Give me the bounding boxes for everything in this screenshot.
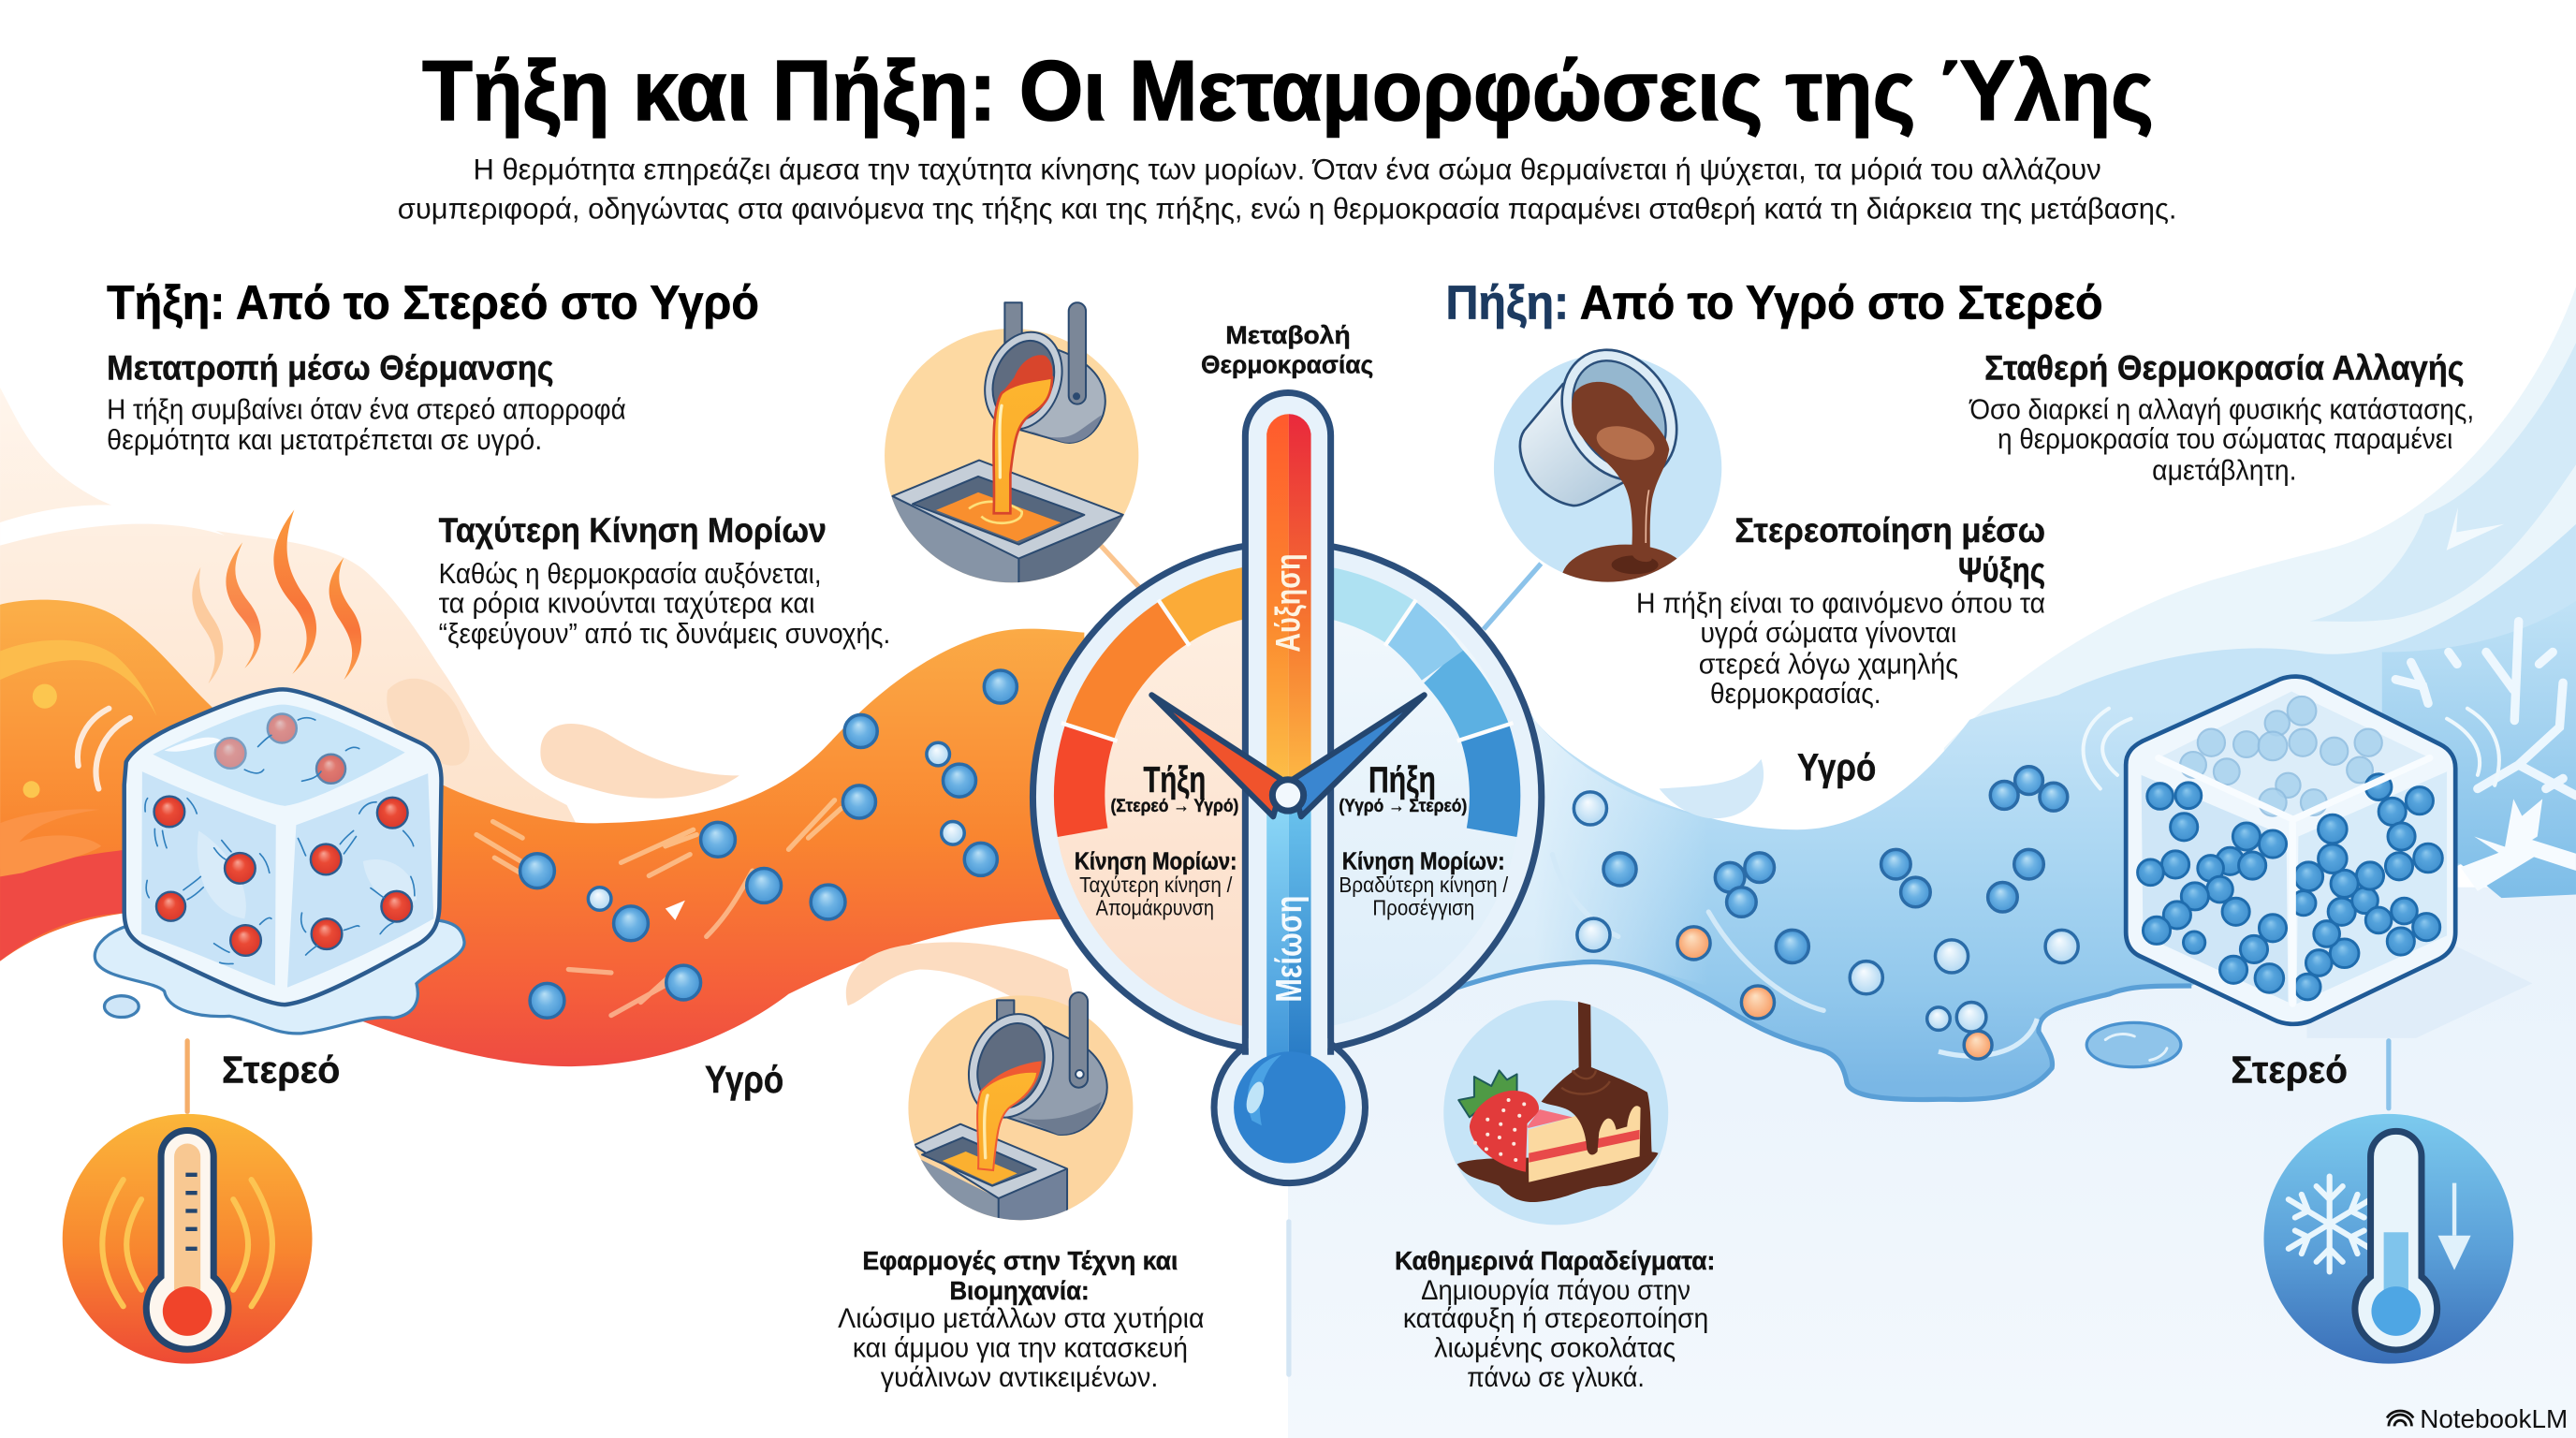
cube body: [124, 689, 441, 1005]
text block: everyday examples: Δημιουργία πάγου στην: [1421, 1275, 1690, 1306]
white swoosh in swirl: [0, 505, 225, 546]
text block: applications: και άμμου για την κατασκευή: [853, 1333, 1188, 1364]
top face: [2159, 691, 2430, 817]
peach blob lower: [846, 942, 1084, 1051]
gauge left half: [1054, 620, 1242, 1026]
orange link: [184, 1038, 190, 1114]
heading: melting: Τήξη: Από το Στερεό στο Υγρό: [107, 275, 759, 329]
yellow crescent: [0, 640, 156, 716]
intro text: Η θερμότητα επηρεάζει άμεσα την ταχύτητα κίνησης των μορίων. Όταν ένα σώμα θερμαίνεται ή ψύχεται, τα μόριά του αλλάζουν: [474, 152, 2101, 185]
face shading: [198, 830, 417, 918]
text block: solidifying by cooling: θερμοκρασίας.: [1710, 677, 1881, 710]
text block: applications: Εφαρμογές στην Τέχνη και: [862, 1246, 1178, 1275]
text block: constant temperature: [1969, 348, 2474, 486]
hanger right: [1069, 302, 1086, 404]
moving molecules: [520, 670, 1017, 1018]
text block: applications: Βιομηχανία:: [949, 1276, 1090, 1305]
text block: constant temperature: η θερμοκρασία του σώματας παραμένει: [1998, 422, 2452, 455]
text block: constant temperature: Όσο διαρκεί η αλλαγή φυσικής κατάστασης,: [1969, 393, 2474, 426]
ice shard: [2461, 799, 2576, 891]
thermometer fill: [2384, 1232, 2408, 1290]
chocolate stream: [1572, 382, 1669, 562]
background: cool lower right: [1288, 888, 2576, 1438]
left face: [2142, 775, 2288, 1002]
molten stream: [993, 377, 1052, 513]
mould top: [914, 1124, 1067, 1198]
liquid molecules: [1573, 767, 2078, 1059]
mould sides: [921, 1159, 998, 1218]
bulb: [1214, 1032, 1365, 1183]
cube edge highlights: [2159, 758, 2430, 1004]
pale peach swirl: [0, 388, 592, 855]
text block: applications: γυάλινων αντικειμένων.: [881, 1362, 1158, 1393]
ice crystals: [2395, 622, 2576, 796]
text block: faster motion: Ταχύτερη Κίνηση Μορίων: [439, 511, 827, 550]
icon: chocolate pouring: [1494, 348, 1722, 582]
gauge text: melting: Κίνηση Μορίων:: [1075, 848, 1237, 874]
ice cube: solid melting: [95, 689, 464, 1034]
cube shadow: [2307, 946, 2532, 1038]
sparks: [33, 684, 57, 709]
red needle: [1151, 695, 1283, 816]
gauge text: freezing: [1339, 760, 1509, 920]
small motion arrow: [666, 901, 685, 920]
water drop: [2086, 1022, 2181, 1067]
text block: constant temperature: αμετάβλητη.: [2152, 453, 2297, 486]
label: solid right: Στερεό: [2231, 1049, 2348, 1092]
chocolate topping: [1542, 1002, 1652, 1158]
gauge text: freezing: (Υγρό → Στερεό): [1339, 797, 1467, 816]
white swoosh in bowl: [1660, 759, 1764, 818]
crystal area: [2086, 601, 2576, 1067]
text block: solidifying by cooling: [1636, 511, 2045, 710]
label: temperature change: [1201, 320, 1373, 378]
text block: everyday examples: Καθημερινά Παραδείγματα:: [1395, 1246, 1715, 1275]
label: solid left: Στερεό: [222, 1049, 340, 1092]
text block: solidifying by cooling: Ψύξης: [1958, 550, 2045, 589]
text block: solidifying by cooling: Στερεοποίηση μέσω: [1734, 511, 2045, 550]
hanger left: [1004, 302, 1022, 344]
panel: freezing wave: [1288, 286, 2576, 1100]
trapped particles: [268, 713, 297, 742]
label: temperature change: Θερμοκρασίας: [1201, 349, 1373, 378]
chocolate puddle: [1563, 545, 1677, 582]
right face: [2297, 771, 2447, 1004]
icon: cooling thermometer: [2263, 1038, 2513, 1364]
gauge text: melting: [1075, 760, 1238, 920]
gauge text: melting: Τήξη: [1144, 760, 1206, 800]
upper right pale wash: [1944, 286, 2576, 751]
notebooklm mark: NotebookLM: [2420, 1404, 2568, 1433]
ladle rim: [972, 321, 1076, 440]
icon: heating thermometer: [63, 1038, 313, 1364]
connector line: ladle to gauge: [1101, 546, 1140, 588]
text block: everyday examples: πάνω σε γλυκά.: [1467, 1362, 1645, 1393]
text block: conversion by heating: θερμότητα και μετατρέπεται σε υγρό.: [107, 423, 542, 456]
hot column: [1266, 414, 1289, 795]
strawberry: [1470, 1091, 1539, 1172]
gauge right half: [1335, 609, 1462, 1025]
text block: constant temperature: Σταθερή Θερμοκρασία Αλλαγής: [1984, 348, 2465, 387]
intro text: [398, 152, 2176, 225]
melt puddle: [95, 920, 464, 1034]
vibration ticks: [145, 718, 415, 964]
cup rim: [1539, 329, 1700, 501]
blue needle: [1292, 695, 1425, 816]
down arrow: [2453, 1183, 2455, 1236]
label: decrease: Μείωση: [1269, 895, 1310, 1003]
gauge text: melting: (Στερεό → Υγρό): [1110, 797, 1238, 816]
gauge text: freezing: Προσέγγιση: [1372, 896, 1474, 920]
text block: conversion by heating: Η τήξη συμβαίνει όταν ένα στερεό απορροφά: [107, 393, 626, 426]
cup body: [1520, 384, 1673, 506]
cold scale segments: [1324, 592, 1495, 832]
tube: [1245, 392, 1331, 1051]
lower molecules: [2138, 774, 2442, 1000]
icon: ladle pouring into mould (bottom): [908, 992, 1133, 1233]
gauge text: melting: Ταχύτερη κίνηση /: [1079, 873, 1233, 897]
cube body: [2126, 677, 2455, 1024]
label: temperature change: Μεταβολή: [1225, 320, 1351, 349]
divider line: [1286, 1219, 1292, 1377]
heading: freezing: Πήξη: Από το Υγρό στο Στερεό: [1445, 275, 2102, 329]
text block: solidifying by cooling: υγρά σώματα γίνονται: [1701, 616, 1956, 649]
intro text: συμπεριφορά, οδηγώντας στα φαινόμενα της τήξης και της πήξης, ενώ η θερμοκρασία παραμένει σταθερή κατά τη διάρκεια της μετάβασης.: [398, 191, 2176, 225]
icon: cake with chocolate: [1443, 1000, 1668, 1225]
gauge needles: [1151, 695, 1425, 816]
text block: faster motion: Καθώς η θερμοκρασία αυξόνεται,: [439, 557, 822, 590]
text block: solidifying by cooling: στερεά λόγω χαμηλής: [1699, 648, 1958, 681]
thermometer: [1214, 392, 1365, 1183]
band streaks: [476, 800, 842, 1016]
ticks: [185, 1175, 198, 1249]
heat waves: [102, 1180, 272, 1306]
blue link: [2386, 1038, 2392, 1110]
vibration arcs: [78, 709, 130, 788]
pale swoosh: [0, 809, 101, 876]
hanger left: [997, 1000, 1014, 1028]
label: liquid left: Υγρό: [705, 1058, 783, 1101]
text block: everyday examples: λιωμένης σοκολάτας: [1434, 1333, 1676, 1364]
text block: applications: [838, 1246, 1204, 1393]
pale highlights: [1939, 1019, 2037, 1056]
ladle body: [1017, 337, 1105, 443]
gauge text: freezing: Πήξη: [1368, 760, 1436, 800]
label: increase: Αύξηση: [1268, 553, 1307, 653]
hanger right: [1070, 992, 1088, 1088]
text block: faster motion: [439, 511, 890, 650]
text block: conversion by heating: Μετατροπή μέσω Θέρμανσης: [107, 348, 554, 387]
panel: melting wave: [0, 388, 1084, 1066]
left band details: [0, 640, 156, 961]
title: Τήξη και Πήξη: Οι Μεταμορφώσεις της Ύλης: [422, 43, 2154, 139]
ladle body: [1002, 1023, 1107, 1135]
orange band: [0, 600, 1084, 1066]
flames above ice: [192, 510, 361, 683]
text block: solidifying by cooling: Η πήξη είναι το φαινόμενο όπου τα: [1636, 587, 2045, 620]
peach blob upper: [540, 724, 739, 799]
scale ticks: [1061, 600, 1513, 741]
text block: conversion by heating: [107, 348, 626, 456]
upper molecules: [2180, 697, 2382, 816]
molten stream: [977, 1072, 1037, 1170]
water lower edge: [1329, 961, 2191, 1100]
text block: faster motion: τα ρόρια κινούνται ταχύτερα και: [439, 587, 815, 620]
chocolate pool: [1457, 1152, 1659, 1202]
gauge: [1032, 543, 1542, 1051]
text block: everyday examples: κατάφυξη ή στερεοποίηση: [1403, 1303, 1708, 1334]
mould: [891, 459, 1124, 582]
pale water near gauge: [1453, 720, 1708, 990]
ladle rim: [955, 1002, 1067, 1129]
thermometer outline: [2355, 1131, 2437, 1350]
strawberry leaves: [1458, 1070, 1517, 1117]
red swell: [0, 850, 126, 961]
water band: [1288, 524, 2576, 1100]
hot scale segments: [1079, 592, 1251, 832]
bulb fill: [1234, 1051, 1345, 1164]
text block: everyday examples: [1395, 1246, 1715, 1393]
cube faces: [153, 705, 405, 806]
ice cube: solid with tight molecules: [2126, 677, 2455, 1024]
gauge rim: [1032, 543, 1542, 1051]
gauge text: freezing: Κίνηση Μορίων:: [1342, 848, 1505, 874]
cake slice: [1529, 1105, 1641, 1182]
text block: faster motion: “ξεφεύγουν” από τις δυνάμεις συνοχής.: [439, 617, 890, 650]
text block: applications: Λιώσιμο μετάλλων στα χυτήρια: [838, 1303, 1204, 1334]
connector line: chocolate to gauge: [1484, 564, 1541, 629]
hub: [1272, 780, 1304, 811]
icon: ladle pouring into mould (top): [885, 301, 1138, 582]
vibration arcs right: [2084, 709, 2499, 788]
thermometer fill: [174, 1143, 200, 1290]
cold column: [1266, 795, 1289, 1075]
label: liquid right: Υγρό: [1797, 746, 1876, 789]
gauge text: freezing: Βραδύτερη κίνηση /: [1339, 873, 1509, 897]
melt drop: [104, 996, 139, 1018]
thermometer outline: [146, 1130, 228, 1349]
gauge text: melting: Απομάκρυνση: [1096, 896, 1214, 920]
snowflake: [2289, 1177, 2371, 1271]
